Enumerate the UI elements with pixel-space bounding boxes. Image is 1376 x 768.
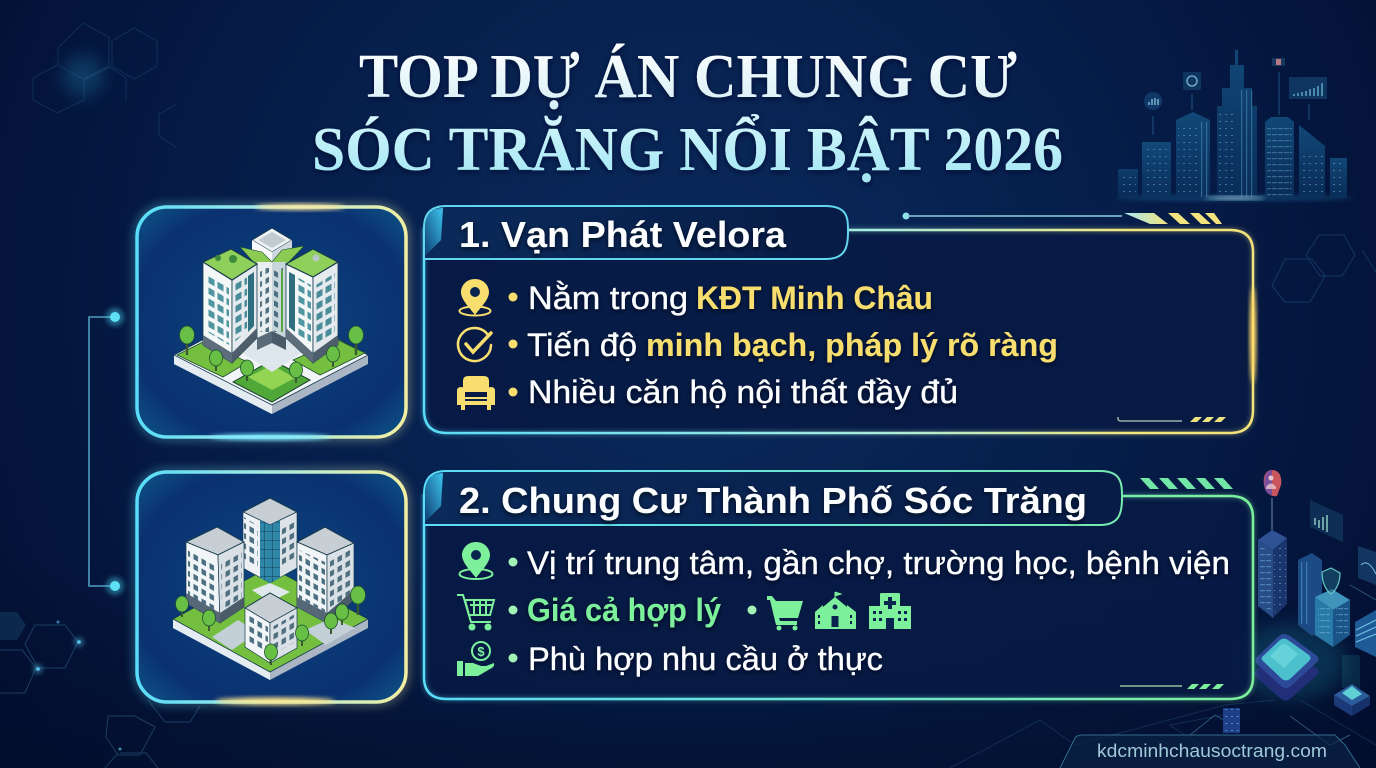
panel: project 2 details (424, 471, 1253, 699)
item: real need: Phù hợp nhu cầu ở thực (528, 641, 883, 677)
item: location: KĐT Minh Châu (696, 280, 933, 316)
item: location: Nằm trong (528, 280, 688, 316)
item: furniture: Nhiều căn hộ nội thất đầy đủ (528, 374, 958, 410)
heading tab: 2. Chung Cư Thành Phố Sóc Trăng (459, 480, 1087, 521)
illustration: isometric apartment with courtyard (174, 228, 368, 414)
item: price: Giá cả hợp lý (527, 592, 721, 628)
decorative bar bottom (1120, 684, 1224, 689)
pin badge (1264, 470, 1281, 496)
panel: image of Chung Cư Thành Phố Sóc Trăng (137, 472, 406, 704)
heading tab (424, 471, 1122, 525)
icon: check circle (458, 328, 491, 361)
heading tab (424, 206, 848, 259)
icon: school (815, 592, 856, 629)
panel: image of Vạn Phát Velora (137, 204, 406, 440)
heading tab: 1. Vạn Phát Velora (459, 214, 787, 255)
panel: project 1 details (424, 206, 1256, 433)
isometric towers right (1298, 553, 1376, 657)
item: progress: Tiến độ (527, 327, 637, 363)
item: progress: minh bạch, pháp lý rõ ràng (646, 327, 1058, 363)
title: TOP DỰ ÁN CHUNG CƯ (359, 43, 1017, 111)
item: location: Vị trí trung tâm, gần chợ, trường học, bệnh viện (527, 545, 1230, 581)
item: progress (458, 327, 1058, 363)
title: SÓC TRĂNG NỔI BẬT 2026 (312, 115, 1063, 184)
icon: hand with coin (457, 642, 494, 676)
website watermark: kdcminhchausoctrang.com (1097, 741, 1327, 761)
icon: shopping cart with grid (457, 595, 494, 630)
icon: location pin (460, 542, 492, 579)
illustration: isometric apartment cluster (173, 498, 368, 680)
small server block (1223, 655, 1370, 733)
isometric tower left (1258, 530, 1287, 618)
icon: cart (767, 596, 803, 630)
connector between projects (89, 308, 124, 595)
decorative bar top (902, 212, 1222, 224)
title (312, 43, 1063, 184)
icon: location pin (460, 279, 490, 316)
tech city illustration (1190, 470, 1376, 745)
item: price (457, 592, 911, 630)
icon: hand with coin: $ (477, 644, 485, 659)
icon: armchair (457, 376, 495, 410)
decorative bar bottom (1118, 417, 1226, 422)
skyline illustration (1115, 50, 1355, 201)
website watermark (1060, 735, 1360, 768)
data panels and connecting lines (1190, 498, 1376, 745)
glowing platform (1254, 634, 1318, 700)
icon: hospital (869, 593, 911, 629)
item: location (460, 279, 933, 316)
decorative bar top (1140, 478, 1233, 489)
